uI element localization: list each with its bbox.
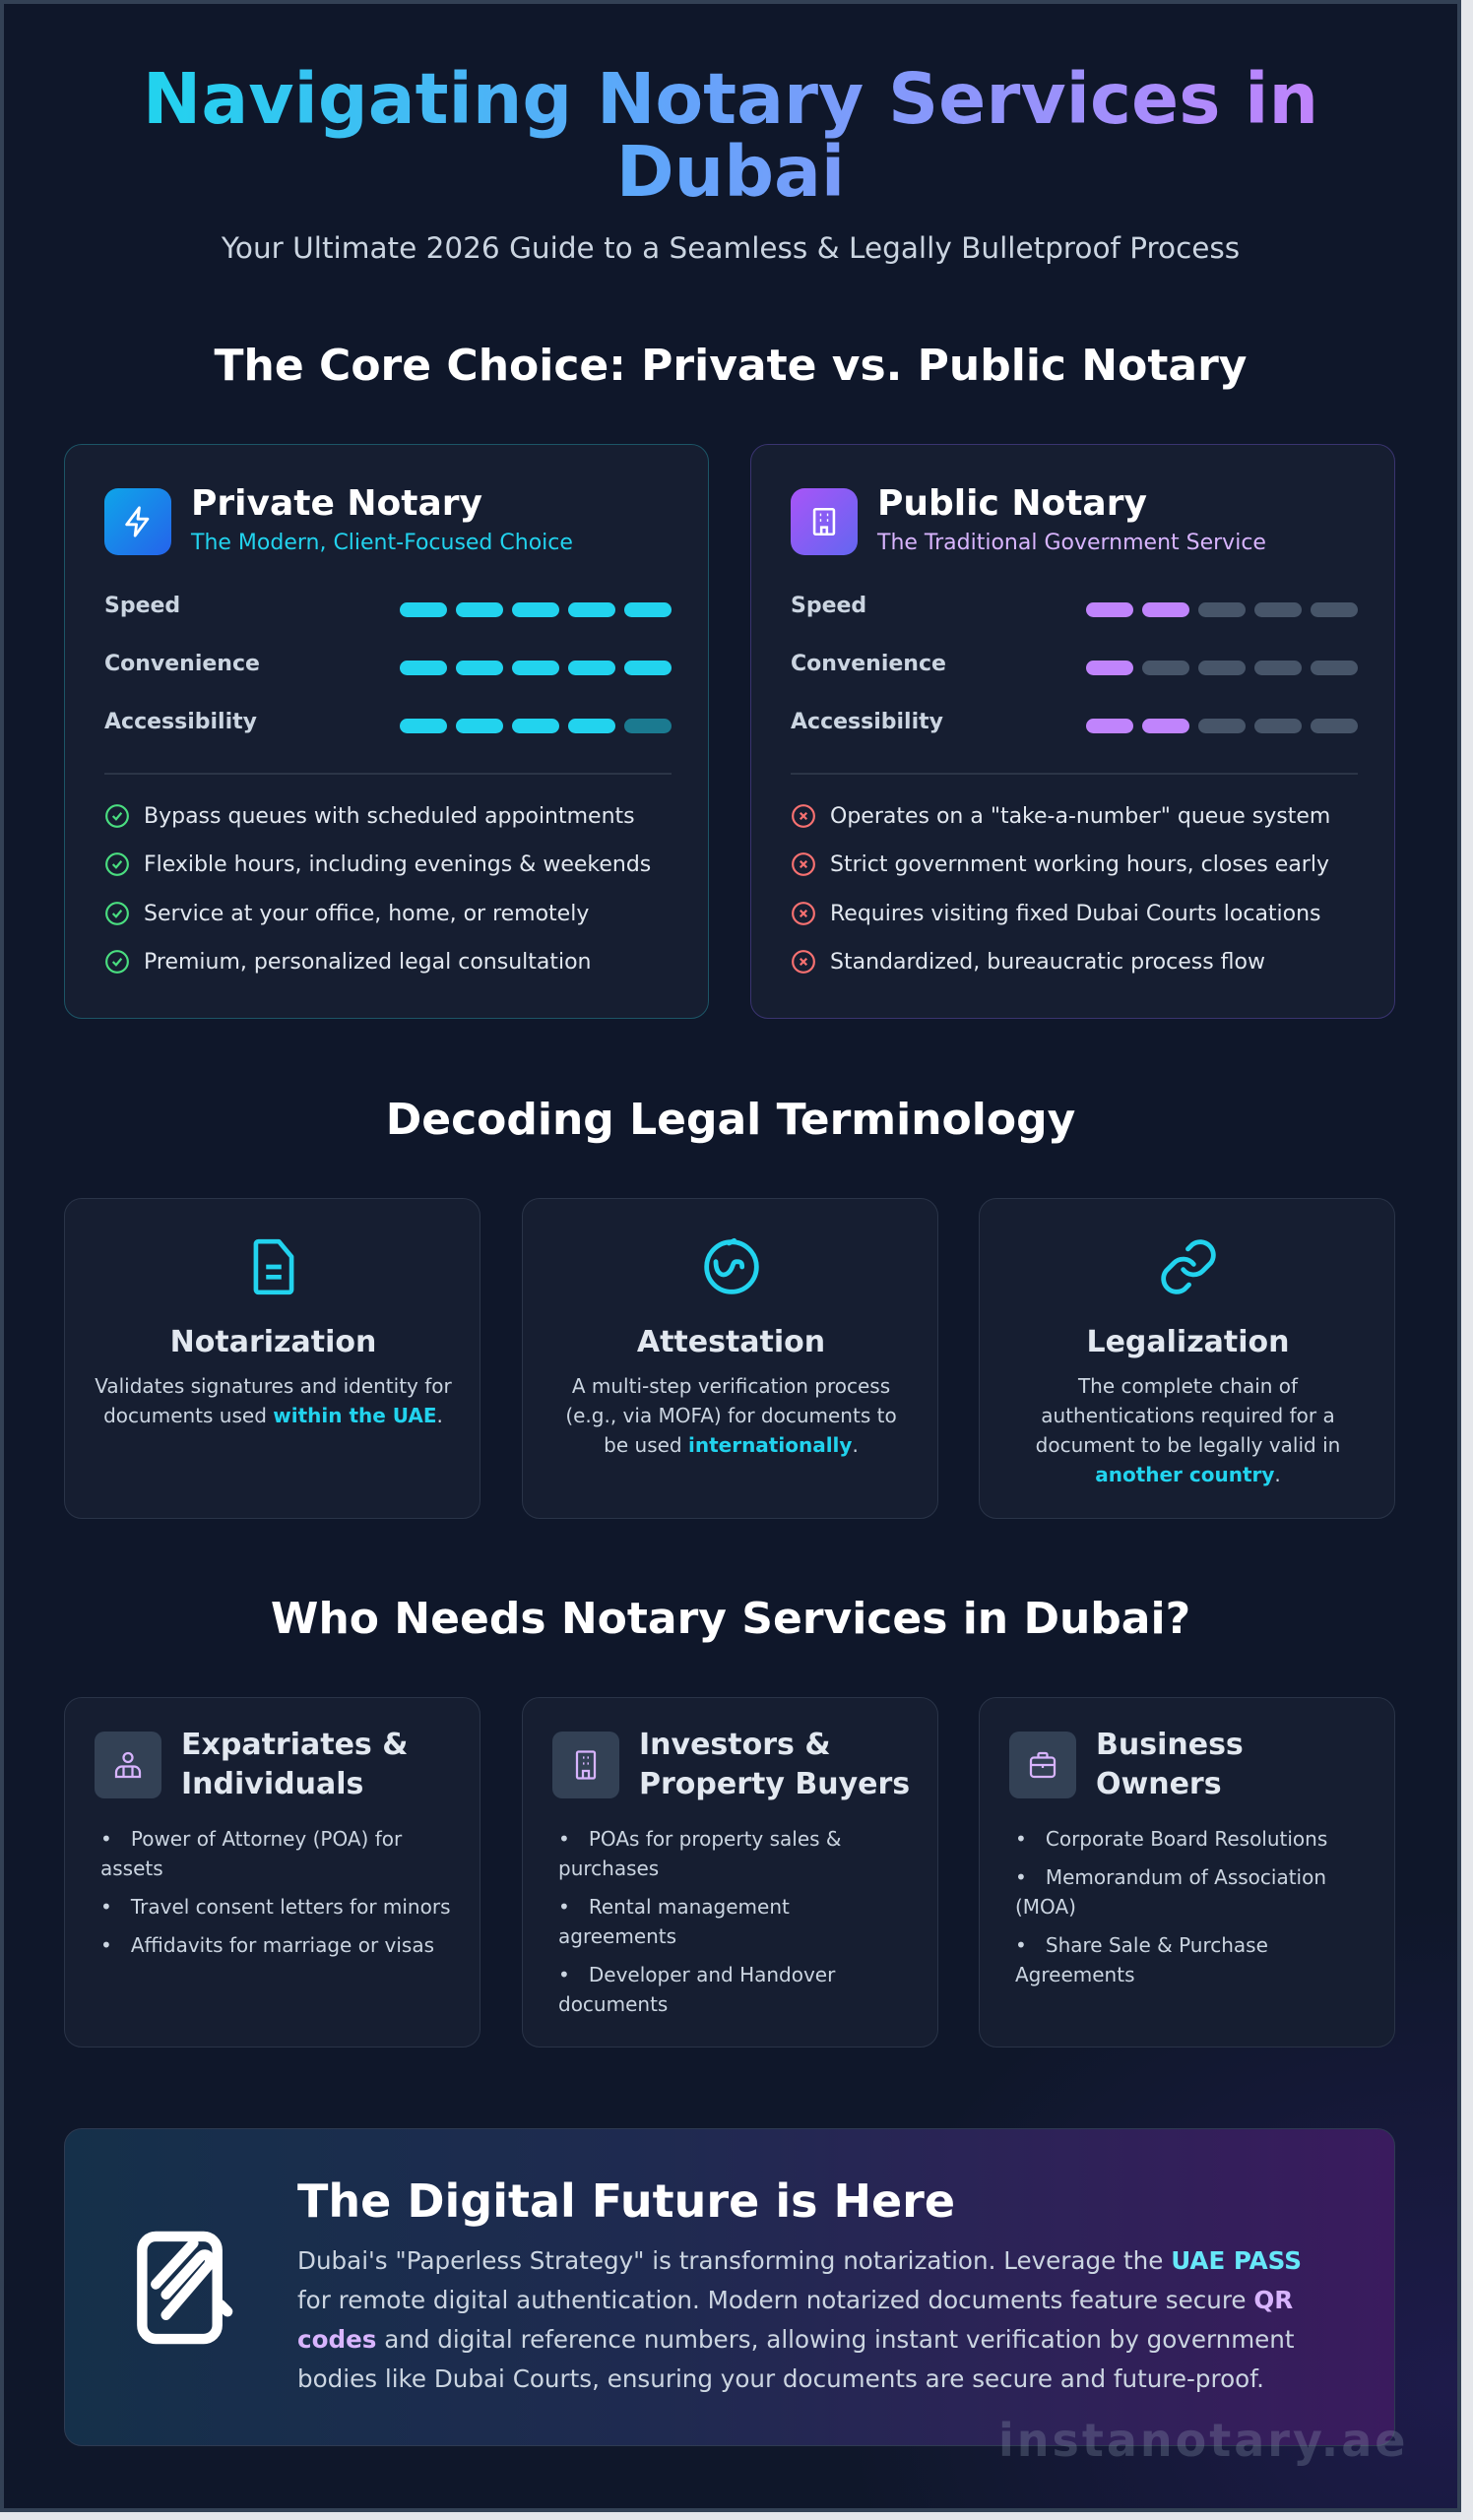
callout text: for remote digital authentication. Modern notarized documents feature secure QR: [297, 2286, 1293, 2314]
card title: Individuals: [181, 1767, 363, 1801]
panel: expatriates: [64, 1697, 480, 2048]
rating: convenience: Convenience: [791, 652, 946, 676]
rating: accessibility: Accessibility: [104, 710, 257, 734]
rating: accessibility: Accessibility: [791, 710, 943, 734]
panel: public notary: [750, 444, 1395, 1019]
card title: Private Notary: [191, 483, 482, 524]
icon: building: [552, 1732, 619, 1798]
bullet list: agreements: [558, 1924, 676, 1948]
term text: Validates signatures and identity for: [95, 1374, 452, 1398]
benefits list: Bypass queues with scheduled appointments: [144, 803, 635, 829]
bullet list: (MOA): [1015, 1895, 1076, 1919]
panel: attestation: [522, 1198, 938, 1519]
card title: Public Notary: [877, 483, 1147, 524]
title: Dubai: [616, 131, 845, 213]
icon: digital document: [137, 2231, 232, 2345]
icon: building: [791, 488, 858, 555]
term text: document to be legally valid in: [1036, 1433, 1340, 1457]
callout text: [297, 2246, 1302, 2393]
panel: investors: [522, 1697, 938, 2048]
bullet list: • Travel consent letters for minors: [100, 1895, 451, 1919]
callout text: codes and digital reference numbers, allowing instant verification by government: [297, 2325, 1295, 2354]
bullet list: • Power of Attorney (POA) for: [100, 1827, 402, 1851]
term text: (e.g., via MOFA) for documents to: [565, 1404, 897, 1427]
bullet list: • Rental management: [558, 1895, 790, 1919]
benefits list: Flexible hours, including evenings & weekends: [144, 852, 651, 876]
title: Navigating Notary Services in: [143, 58, 1318, 140]
drawbacks list: Standardized, bureaucratic process flow: [830, 949, 1265, 975]
panel: business owners: [979, 1697, 1395, 2048]
rating: convenience: Convenience: [104, 652, 260, 676]
panel: private notary: [64, 444, 709, 1019]
icon: briefcase: [1009, 1732, 1076, 1798]
term text: authentications required for a: [1041, 1404, 1335, 1427]
rating: speed: Speed: [104, 594, 180, 618]
bullet list: documents: [558, 1992, 668, 2016]
title: [0, 63, 1461, 209]
card title: Property Buyers: [639, 1767, 910, 1801]
heading: who needs: Who Needs Notary Services in Dubai?: [271, 1594, 1190, 1644]
drawbacks list: Operates on a "take-a-number" queue system: [830, 803, 1330, 829]
icon: seal: [704, 1238, 759, 1294]
term text: [95, 1325, 452, 1427]
callout title: The Digital Future is Here: [297, 2174, 955, 2228]
icon: link: [1161, 1239, 1216, 1294]
panel: notarization: [64, 1198, 480, 1519]
bullet list: • POAs for property sales &: [558, 1827, 842, 1851]
card title: Business: [1096, 1728, 1244, 1762]
term text: another country.: [1095, 1463, 1281, 1486]
rating: speed: Speed: [791, 594, 866, 618]
subtitle: Your Ultimate 2026 Guide to a Seamless & Legally Bulletproof Process: [222, 231, 1240, 265]
callout text: Dubai's "Paperless Strategy" is transforming notarization. Leverage the UAE PASS: [297, 2246, 1302, 2275]
benefits list: Premium, personalized legal consultation: [144, 949, 592, 975]
drawbacks list: Strict government working hours, closes early: [830, 852, 1329, 876]
term text: be used internationally.: [604, 1433, 859, 1457]
panel: digital future: [64, 2128, 1395, 2446]
term text: The complete chain of: [1078, 1374, 1298, 1398]
card title: Expatriates &: [181, 1728, 408, 1762]
card subtitle: The Traditional Government Service: [877, 531, 1266, 555]
term text: A multi-step verification process: [572, 1374, 890, 1398]
term text: Notarization: [170, 1325, 376, 1359]
bullet list: • Memorandum of Association: [1015, 1865, 1326, 1889]
benefits list: [105, 803, 651, 975]
bullet list: [1015, 1827, 1327, 1986]
term text: Legalization: [1086, 1325, 1290, 1359]
watermark: instanotary.ae: [998, 2414, 1408, 2467]
drawbacks list: [792, 803, 1330, 975]
bullet list: [558, 1827, 842, 2016]
panel: legalization: [979, 1198, 1395, 1519]
bullet list: Agreements: [1015, 1963, 1134, 1986]
icon: person: [95, 1732, 161, 1798]
term text: [565, 1325, 897, 1457]
card title: [1096, 1728, 1244, 1801]
card subtitle: The Modern, Client-Focused Choice: [191, 531, 573, 555]
term text: Attestation: [637, 1325, 825, 1359]
card title: [639, 1728, 910, 1801]
bullet list: • Affidavits for marriage or visas: [100, 1933, 434, 1957]
benefits list: Service at your office, home, or remotely: [144, 902, 589, 925]
bullet list: purchases: [558, 1857, 659, 1880]
term text: [1036, 1325, 1340, 1486]
drawbacks list: Requires visiting fixed Dubai Courts locations: [830, 902, 1321, 925]
callout text: bodies like Dubai Courts, ensuring your documents are secure and future-proof.: [297, 2364, 1264, 2393]
bullet list: • Corporate Board Resolutions: [1015, 1827, 1327, 1851]
term text: documents used within the UAE.: [103, 1404, 443, 1427]
bullet list: • Share Sale & Purchase: [1015, 1933, 1268, 1957]
bullet list: • Developer and Handover: [558, 1963, 835, 1986]
card title: [181, 1728, 408, 1801]
icon: lightning: [104, 488, 171, 555]
bullet list: assets: [100, 1857, 163, 1880]
heading: terminology: Decoding Legal Terminology: [386, 1095, 1075, 1145]
icon: document: [254, 1238, 293, 1295]
card title: Owners: [1096, 1767, 1222, 1801]
heading: core choice: The Core Choice: Private vs. Public Notary: [215, 341, 1247, 391]
card title: Investors &: [639, 1728, 831, 1762]
bullet list: [100, 1827, 451, 1957]
